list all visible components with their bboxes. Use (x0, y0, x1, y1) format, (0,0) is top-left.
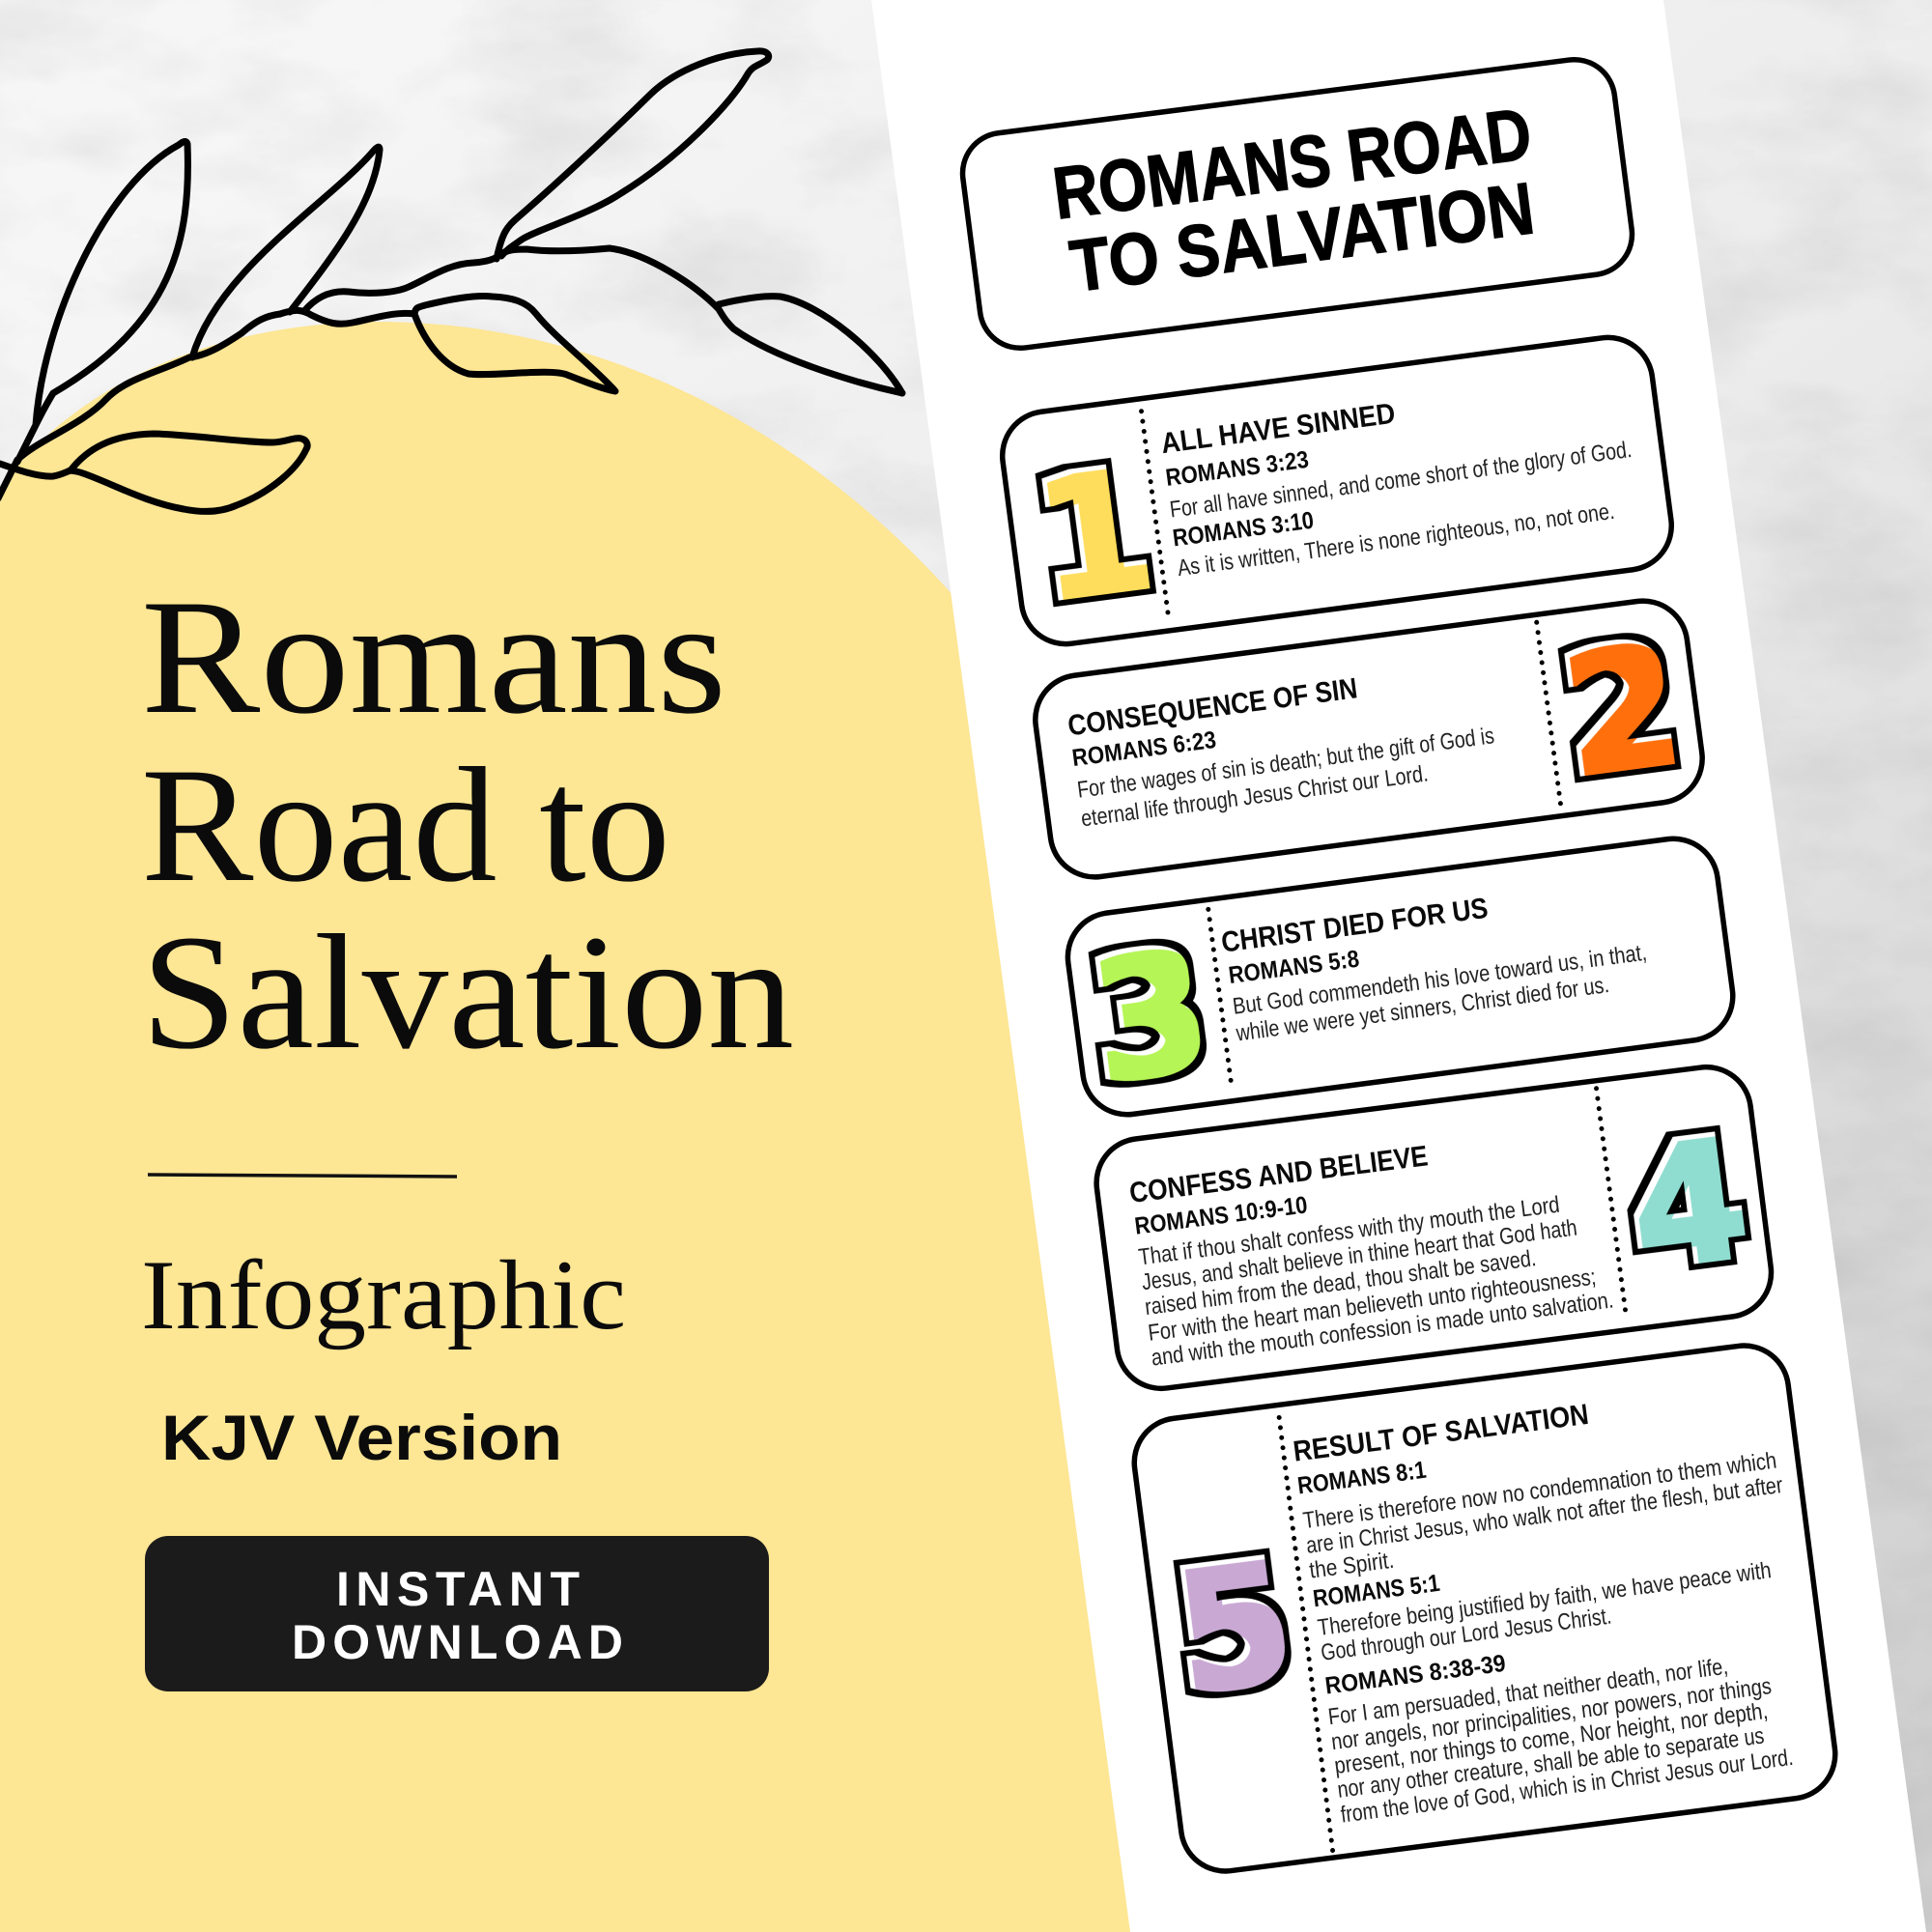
numeral 2: 2 (1555, 610, 1695, 817)
panel: step 2 consequence of sin: CONSEQUENCE OF SIN (1065, 672, 1359, 742)
panel: step 5 result of salvation: are in Christ Jesus, who walk not after the flesh, but after (1305, 1472, 1784, 1559)
panel: step 2 consequence of sin: ROMANS 6:23 (1070, 726, 1218, 772)
panel: step 5 result of salvation: ROMANS 8:38-39 (1323, 1650, 1507, 1700)
panel: step 5 result of salvation: present, nor things to come, Nor height, nor depth, (1333, 1698, 1770, 1779)
numeral 3: 3 (1084, 916, 1224, 1123)
panel: step 3 christ died for us: while we were yet sinners, Christ died for us. (1234, 972, 1610, 1047)
panel: step 5 result of salvation: There is therefore now no condemnation to them which (1301, 1447, 1778, 1534)
panel: step 1 all have sinned: ROMANS 3:10 (1171, 507, 1316, 552)
panel: step 5 result of salvation (1129, 1341, 1840, 1876)
panel: step 1 all have sinned: For all have sinned, and come short of the glory of God. (1168, 437, 1634, 524)
panel: step 3 christ died for us: CHRIST DIED FOR US (1219, 893, 1490, 959)
panel: step 4 confess and believe: ROMANS 10:9-10 (1133, 1191, 1309, 1240)
divider line (148, 1175, 457, 1177)
panel: step 4 confess and believe: CONFESS AND BELIEVE (1127, 1140, 1430, 1209)
panel: step 3 christ died for us: But God commendeth his love toward us, in that, (1231, 940, 1648, 1020)
numeral 1: 1 (1028, 435, 1168, 642)
button: instant download: INSTANT (336, 1562, 580, 1616)
numeral 5: 5 (1168, 1527, 1307, 1735)
subtitle: Infographic: Infographic (141, 1240, 626, 1350)
panel: title card: ROMANS ROAD (1048, 93, 1536, 236)
panel: step 3 christ died for us (1063, 834, 1739, 1125)
numeral 4: 4 (1617, 1099, 1756, 1307)
panel: step 1 all have sinned (997, 332, 1677, 649)
numeral 1: 1 (1022, 430, 1162, 638)
icon: olive branch line art (0, 51, 902, 512)
panel: step 5 result of salvation: For I am persuaded, that neither death, nor life, (1326, 1654, 1729, 1730)
yellow arch shape (0, 322, 1140, 1932)
panel: step 1 all have sinned: ROMANS 3:23 (1164, 446, 1310, 492)
main title: Romans (141, 566, 726, 748)
numeral 3: 3 (1078, 911, 1218, 1119)
panel: step 4 confess and believe: That if thou shalt confess with thy mouth the Lord (1137, 1192, 1561, 1270)
main title: Road to (141, 734, 670, 916)
button: instant download (145, 1536, 769, 1691)
panel: step 1 all have sinned: ALL HAVE SINNED (1159, 398, 1397, 460)
panel: step 2 consequence of sin (1030, 596, 1708, 886)
panel: step 5 result of salvation: ROMANS 5:1 (1312, 1570, 1441, 1612)
button: instant download: DOWNLOAD (292, 1615, 623, 1669)
panel: step 4 confess and believe: and with the mouth confession is made unto salvation. (1150, 1287, 1615, 1372)
numeral 4: 4 (1623, 1104, 1762, 1311)
panel: step 2 consequence of sin: For the wages of sin is death; but the gift of God is (1076, 723, 1495, 804)
subtitle: KJV Version: KJV Version (161, 1402, 562, 1473)
panel: step 5 result of salvation: God through our Lord Jesus Christ. (1320, 1604, 1613, 1666)
panel: step 5 result of salvation: ROMANS 8:1 (1296, 1457, 1428, 1499)
panel: step 5 result of salvation: RESULT OF SALVATION (1292, 1399, 1590, 1468)
numeral 2: 2 (1550, 606, 1690, 813)
panel: step 5 result of salvation: the Spirit. (1308, 1548, 1396, 1584)
panel: title card (958, 55, 1636, 353)
panel: step 1 all have sinned: As it is written, There is none righteous, no, not one. (1176, 498, 1616, 582)
panel: step 3 christ died for us: ROMANS 5:8 (1227, 946, 1361, 989)
white document panel (871, 0, 1926, 1932)
panel: step 4 confess and believe (1092, 1062, 1776, 1394)
panel: title card: TO SALVATION (1065, 167, 1539, 308)
numeral 5: 5 (1162, 1523, 1301, 1730)
panel: step 4 confess and believe: For with the heart man believeth unto righteousness; (1147, 1264, 1598, 1347)
main title: Salvation (141, 901, 794, 1083)
panel: step 5 result of salvation: Therefore being justified by faith, we have peace with (1317, 1557, 1773, 1641)
main title (141, 566, 794, 1083)
panel: step 5 result of salvation: from the love of God, which is in Christ Jesus our Lord. (1339, 1745, 1795, 1829)
panel: step 5 result of salvation: nor any other creature, shall be able to separate us (1336, 1722, 1766, 1804)
panel: step 4 confess and believe: Jesus, and shalt believe in thine heart that God hath (1140, 1215, 1578, 1295)
panel: step 2 consequence of sin: eternal life through Jesus Christ our Lord. (1080, 760, 1430, 832)
panel: step 4 confess and believe: raised him from the dead, thou shalt be saved. (1144, 1245, 1538, 1321)
panel: step 5 result of salvation: nor angels, nor principalities, nor powers, nor things (1330, 1673, 1773, 1755)
